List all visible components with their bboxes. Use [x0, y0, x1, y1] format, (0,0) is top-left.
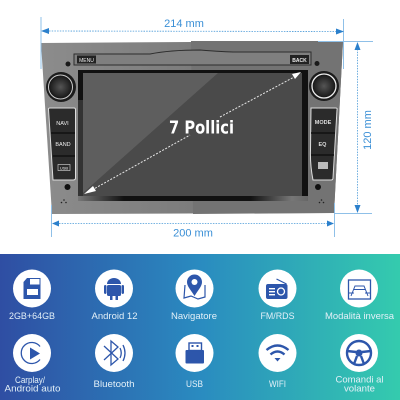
screen size label: 7 Pollici [169, 118, 234, 138]
feature: Comandi al volante: Comandi al [336, 374, 384, 386]
dimension: side height 120 mm: 120 mm [362, 110, 374, 150]
car stereo device [41, 41, 343, 214]
disc slot [74, 50, 311, 65]
left knob [46, 72, 76, 102]
right button panel [310, 108, 337, 180]
feature: Carplay/Android auto [4, 334, 60, 394]
left button panel [48, 108, 76, 180]
features panel [0, 254, 400, 400]
feature: FM/RDS [258, 270, 296, 322]
left button panel: BAND [55, 142, 71, 148]
feature: Bluetooth [94, 334, 134, 390]
dimension: bottom width 200 mm: 200 mm [173, 228, 213, 240]
dimension: top width 214 mm [41, 17, 344, 69]
menu button [77, 56, 96, 64]
feature: Modalità inversa [325, 270, 395, 322]
right sensor dots [314, 61, 324, 203]
back button [290, 55, 309, 64]
dimension: bottom width 200 mm [52, 203, 334, 240]
back button: BACK [292, 58, 307, 64]
left sensor dots [61, 62, 70, 203]
feature: 2GB+64GB [9, 270, 55, 322]
feature: Comandi al volante [336, 334, 384, 394]
dimension: side height 120 mm [318, 42, 374, 214]
feature: Carplay/Android auto: Android auto [4, 384, 60, 394]
feature: Carplay/Android auto: Carplay/ [15, 375, 45, 386]
feature: Android 12: Android 12 [92, 311, 138, 322]
left button panel: NAVI [56, 121, 69, 127]
feature: Navigatore [171, 270, 217, 322]
feature: Android 12 [92, 270, 138, 322]
dimension: top width 214 mm: 214 mm [164, 18, 204, 30]
right button panel: EQ [319, 142, 327, 148]
feature: Navigatore: Navigatore [171, 311, 217, 322]
screen size arrow [84, 72, 301, 194]
feature: WIFI: WIFI [269, 379, 286, 390]
screen [83, 73, 302, 196]
menu button: MENU [79, 58, 94, 64]
device frame [41, 41, 343, 214]
feature: USB: USB [186, 379, 203, 390]
feature: USB [176, 334, 214, 390]
right button panel: MODE [315, 120, 332, 126]
feature: Comandi al volante: volante [344, 384, 375, 394]
feature: 2GB+64GB: 2GB+64GB [9, 311, 55, 322]
feature: Bluetooth: Bluetooth [94, 379, 134, 390]
feature: Modalità inversa: Modalità inversa [325, 311, 395, 322]
feature: FM/RDS: FM/RDS [260, 311, 294, 322]
screen bezel [78, 70, 308, 201]
left button panel: USB [60, 166, 68, 170]
feature: WIFI [258, 334, 296, 390]
right knob [309, 71, 339, 101]
